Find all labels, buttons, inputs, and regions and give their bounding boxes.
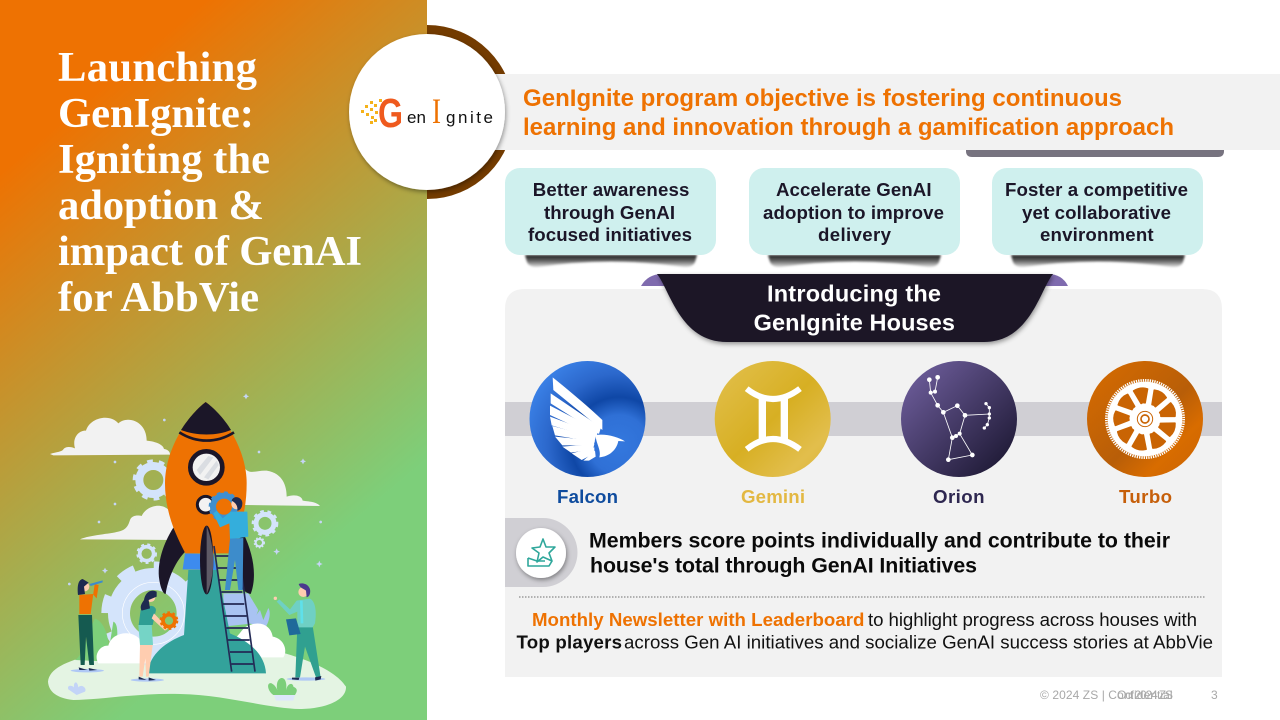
card: better awareness: through GenAI xyxy=(544,202,675,223)
illustration: ground blob xyxy=(48,648,346,709)
text: monthly newsletter: to highlight progress across houses with xyxy=(868,609,1197,630)
card: better awareness: Better awareness xyxy=(533,179,689,200)
illustration: centre fin xyxy=(200,526,213,594)
logo ring xyxy=(427,25,514,199)
illustration: teal launch stand xyxy=(147,570,266,673)
text: members score points xyxy=(589,529,1170,578)
text: monthly newsletter xyxy=(516,609,1213,653)
grey tab below header xyxy=(966,150,1224,157)
illustration: woman with gear xyxy=(131,591,177,682)
illustration: man with clipboard xyxy=(274,583,325,681)
card: accelerate adoption: adoption to improve xyxy=(763,202,944,223)
panel: houses xyxy=(505,289,1222,677)
label: Turbo: Turbo xyxy=(1119,486,1172,507)
card: foster competition: environment xyxy=(1040,224,1154,245)
illustration: sparkles xyxy=(68,393,323,585)
illustration: plants and bottom clouds xyxy=(75,593,285,663)
icon: turbo wheel xyxy=(1087,361,1203,477)
illustration: rocket body xyxy=(165,402,247,553)
illustration: ladder xyxy=(214,546,255,672)
title: Launching xyxy=(58,44,257,91)
title: for AbbVie xyxy=(58,274,259,321)
logo: GenIgnite badge xyxy=(349,34,505,190)
illustration: clouds xyxy=(50,418,320,540)
card: better awareness xyxy=(505,168,716,267)
illustration: rocket launch team xyxy=(48,393,346,709)
ribbon: introducing the houses: Introducing the xyxy=(767,281,941,307)
title: Igniting the xyxy=(58,136,270,183)
logo: wordmark gnite: gnite xyxy=(446,108,493,127)
illustration: rocket fins xyxy=(159,528,254,594)
text: monthly newsletter: Monthly Newsletter with Leaderboard xyxy=(532,609,864,630)
card: foster competition: yet collaborative xyxy=(1022,202,1171,223)
card: accelerate adoption xyxy=(749,168,960,267)
text: members score points: house's total through GenAI Initiatives xyxy=(590,554,977,578)
logo: wordmark I: I xyxy=(432,91,441,131)
header objective text: learning and innovation through a gamification approach xyxy=(523,114,1174,141)
label: Falcon: Falcon xyxy=(557,486,618,507)
panel: left gradient background xyxy=(0,0,427,720)
text: monthly newsletter: across Gen AI initiatives and socialize GenAI success stories at AbbVie xyxy=(624,632,1213,653)
illustration: rocket band xyxy=(179,432,234,441)
card: foster competition: Foster a competitive xyxy=(1005,179,1188,200)
title: GenIgnite: xyxy=(58,90,254,137)
label: Orion: Orion xyxy=(933,486,984,507)
illustration: rocket nose xyxy=(181,402,231,434)
dotted divider xyxy=(519,596,1205,598)
illustration: blue collar xyxy=(183,553,217,570)
header banner strip over ring xyxy=(492,74,522,150)
illustration: rocket windows xyxy=(190,451,222,513)
ribbon: introducing the houses xyxy=(657,274,1053,342)
logo: spark dots xyxy=(361,99,382,124)
footer: 3 xyxy=(1211,688,1218,702)
footer: Oct 2024 ZS xyxy=(1117,688,1173,702)
tab: members scoring xyxy=(505,518,578,587)
illustration: man on ladder xyxy=(210,493,248,590)
logo: wordmark en: en xyxy=(407,108,426,127)
card: accelerate adoption: Accelerate GenAI xyxy=(776,179,932,200)
icon: star and hand xyxy=(528,539,555,566)
house connecting band xyxy=(505,402,1222,436)
footer: © 2024 ZS | Confidential xyxy=(1040,688,1173,702)
ribbon purple ears xyxy=(641,274,1068,286)
logo: G mark: G xyxy=(378,90,403,136)
illustration: woman with telescope xyxy=(71,579,104,672)
illustration: gears xyxy=(107,461,277,660)
icon: gemini xyxy=(715,361,831,477)
text: monthly newsletter: Top players xyxy=(516,632,622,653)
title xyxy=(58,44,362,321)
title: impact of GenAI xyxy=(58,228,362,275)
header objective text xyxy=(523,85,1174,141)
icon: orion xyxy=(901,361,1017,477)
icon: falcon xyxy=(530,361,646,477)
label: Gemini: Gemini xyxy=(741,486,805,507)
header banner xyxy=(480,74,1280,150)
title: adoption & xyxy=(58,182,264,229)
card: foster competition xyxy=(992,168,1203,267)
header objective text: GenIgnite program objective is fostering continuous xyxy=(523,85,1122,112)
illustration: foreground plants xyxy=(68,678,297,701)
ribbon: introducing the houses: GenIgnite Houses xyxy=(754,310,955,336)
text: members score points: Members score points individually and contribute to their xyxy=(589,529,1170,553)
card: better awareness: focused initiatives xyxy=(528,224,692,245)
card: accelerate adoption: delivery xyxy=(818,224,892,245)
